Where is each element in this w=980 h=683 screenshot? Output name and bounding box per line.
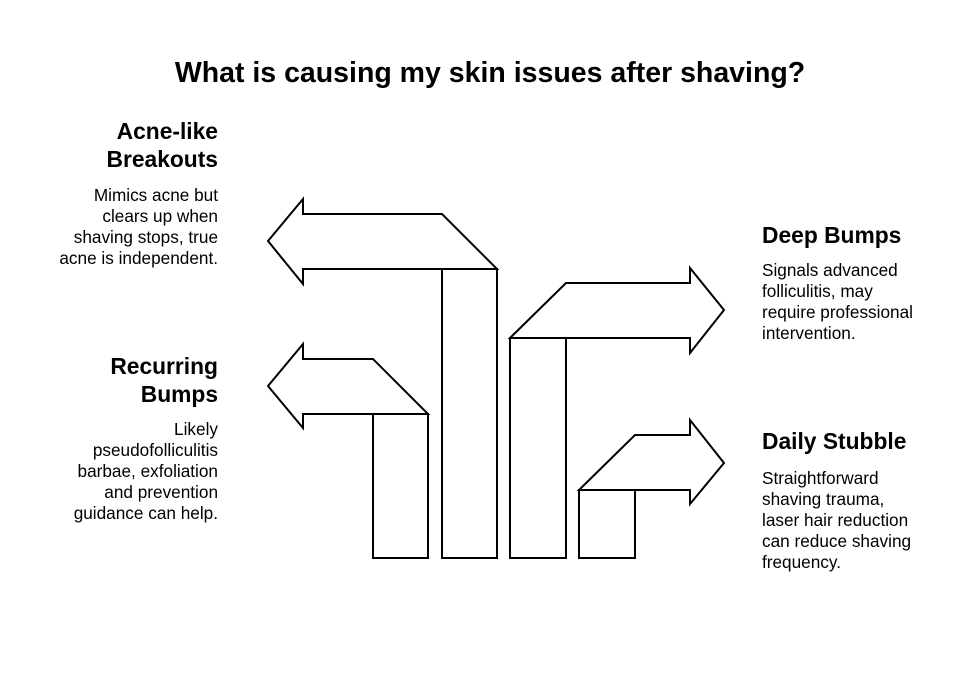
text: deep bumps — [762, 260, 913, 343]
text: recurring bumps — [74, 419, 218, 523]
text: recurring bumps: Likely — [174, 419, 218, 439]
heading: acne-like breakouts — [106, 118, 218, 172]
heading: deep bumps: Deep Bumps — [762, 222, 901, 248]
text: daily stubble: can reduce shaving — [762, 531, 911, 551]
text: daily stubble: laser hair reduction — [762, 510, 908, 530]
text: recurring bumps: barbae, exfoliation — [78, 461, 218, 481]
text: acne-like breakouts: clears up when — [102, 206, 218, 226]
text: deep bumps: intervention. — [762, 323, 856, 343]
text: daily stubble: Straightforward — [762, 468, 879, 488]
text: recurring bumps: pseudofolliculitis — [93, 440, 218, 460]
text: acne-like breakouts: Mimics acne but — [94, 185, 218, 205]
text: recurring bumps: guidance can help. — [74, 503, 218, 523]
heading: recurring bumps: Recurring — [110, 353, 218, 379]
heading: recurring bumps: Bumps — [141, 381, 218, 407]
text: acne-like breakouts — [59, 185, 218, 268]
heading: acne-like breakouts: Breakouts — [106, 146, 218, 172]
arrow: acne-like breakouts — [268, 199, 497, 558]
text: daily stubble: frequency. — [762, 552, 841, 572]
text: deep bumps: Signals advanced — [762, 260, 898, 280]
heading: daily stubble: Daily Stubble — [762, 428, 906, 454]
heading: recurring bumps — [110, 353, 218, 407]
text: acne-like breakouts: acne is independent. — [59, 248, 218, 268]
arrow: recurring bumps — [268, 344, 428, 558]
text: deep bumps: require professional — [762, 302, 913, 322]
text: acne-like breakouts: shaving stops, true — [74, 227, 218, 247]
text: daily stubble: shaving trauma, — [762, 489, 884, 509]
text: daily stubble — [762, 468, 911, 572]
heading: acne-like breakouts: Acne-like — [117, 118, 218, 144]
arrow: daily stubble — [579, 420, 724, 558]
text: deep bumps: folliculitis, may — [762, 281, 873, 301]
title: What is causing my skin issues after shaving? — [175, 57, 805, 89]
arrow: deep bumps — [510, 268, 724, 558]
text: recurring bumps: and prevention — [104, 482, 218, 502]
